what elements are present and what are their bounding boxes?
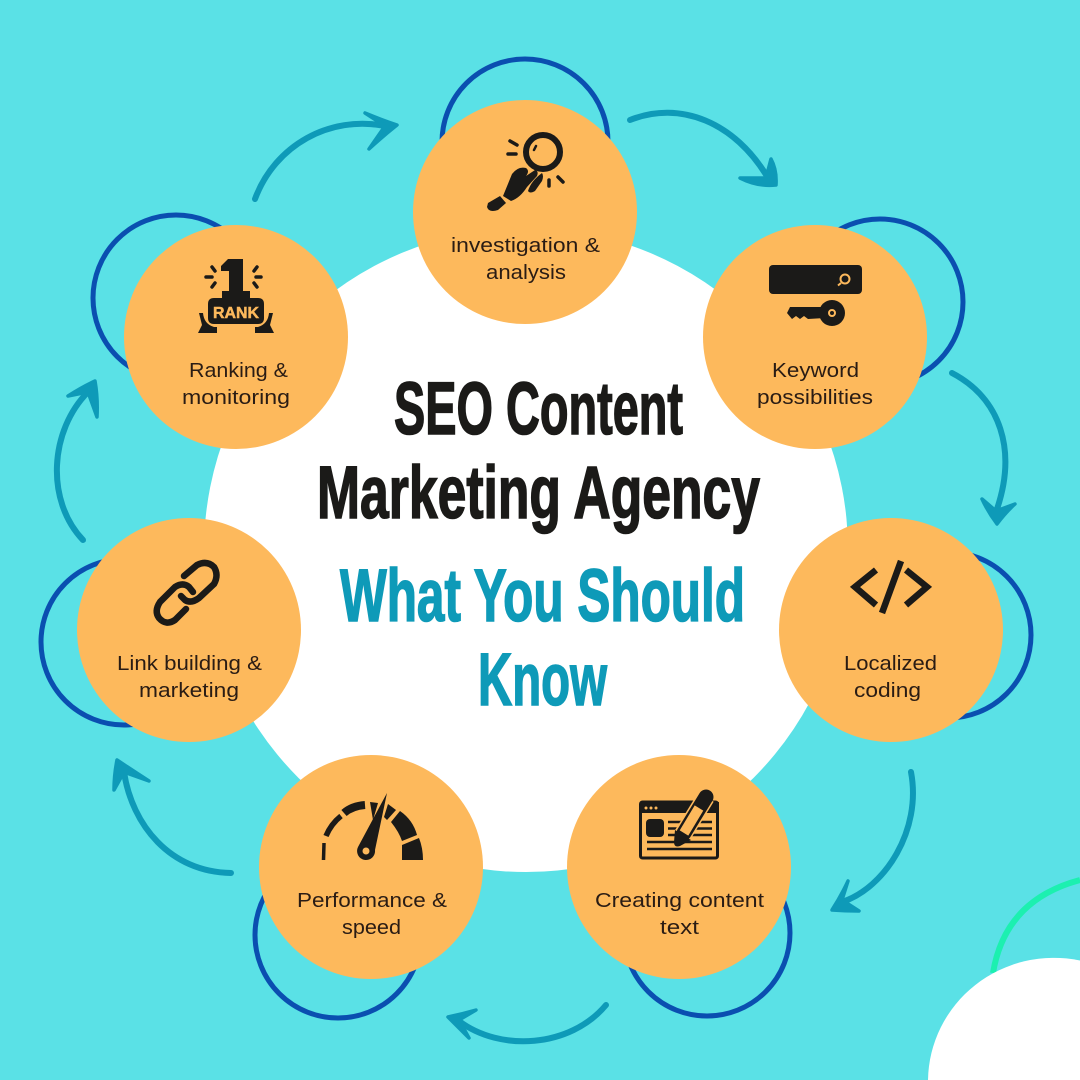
icon: rank one badge: RANK bbox=[213, 305, 259, 322]
node: creating content text: text bbox=[660, 917, 700, 939]
node: link building and marketing: marketing bbox=[139, 680, 239, 702]
arrow: ranking to analysis bbox=[255, 113, 397, 199]
title: SEO Content bbox=[394, 367, 683, 450]
label: Keyword bbox=[772, 360, 859, 382]
node: performance and speed: speed bbox=[342, 917, 401, 939]
icon: rank one badge bbox=[198, 259, 274, 333]
icon: browser window and pencil bbox=[640, 797, 719, 858]
arrow: content to performance bbox=[448, 1005, 606, 1041]
corner decoration bbox=[928, 880, 1080, 1080]
title bbox=[317, 367, 760, 534]
subtitle bbox=[340, 554, 745, 721]
node: ranking and monitoring: monitoring bbox=[182, 387, 290, 409]
subtitle: What You Should bbox=[340, 554, 745, 637]
central white circle bbox=[204, 228, 848, 872]
node: creating content text bbox=[567, 755, 791, 979]
label: Creating content bbox=[595, 890, 765, 912]
node: ranking and monitoring bbox=[124, 225, 348, 449]
arrow: link building to ranking bbox=[57, 381, 97, 540]
node: performance and speed bbox=[259, 755, 483, 979]
subtitle: Know bbox=[478, 638, 607, 721]
node: localized coding: coding bbox=[854, 680, 921, 702]
icon: code brackets bbox=[855, 561, 927, 613]
node: localized coding bbox=[779, 518, 1003, 742]
node: investigation and analysis bbox=[413, 100, 637, 324]
title: Marketing Agency bbox=[317, 451, 760, 534]
node: keyword possibilities bbox=[703, 225, 927, 449]
arrow: performance to link building bbox=[114, 760, 231, 873]
icon: chain link bbox=[157, 563, 216, 623]
node: investigation and analysis: analysis bbox=[486, 262, 566, 284]
node: link building and marketing bbox=[77, 518, 301, 742]
arrow: analysis to keyword bbox=[630, 113, 776, 185]
icon: magnifier and hand bbox=[487, 135, 563, 211]
label: Performance & bbox=[297, 890, 448, 912]
label: Localized bbox=[844, 653, 937, 675]
icon: search bar and key bbox=[769, 265, 862, 326]
label: Link building & bbox=[117, 653, 263, 675]
arrow: coding to content bbox=[832, 772, 913, 911]
label: Ranking & bbox=[189, 360, 289, 382]
label: investigation & bbox=[451, 235, 601, 257]
node: keyword possibilities: possibilities bbox=[757, 387, 873, 409]
icon: speedometer gauge bbox=[324, 793, 423, 860]
arrow: keyword to coding bbox=[952, 373, 1015, 524]
